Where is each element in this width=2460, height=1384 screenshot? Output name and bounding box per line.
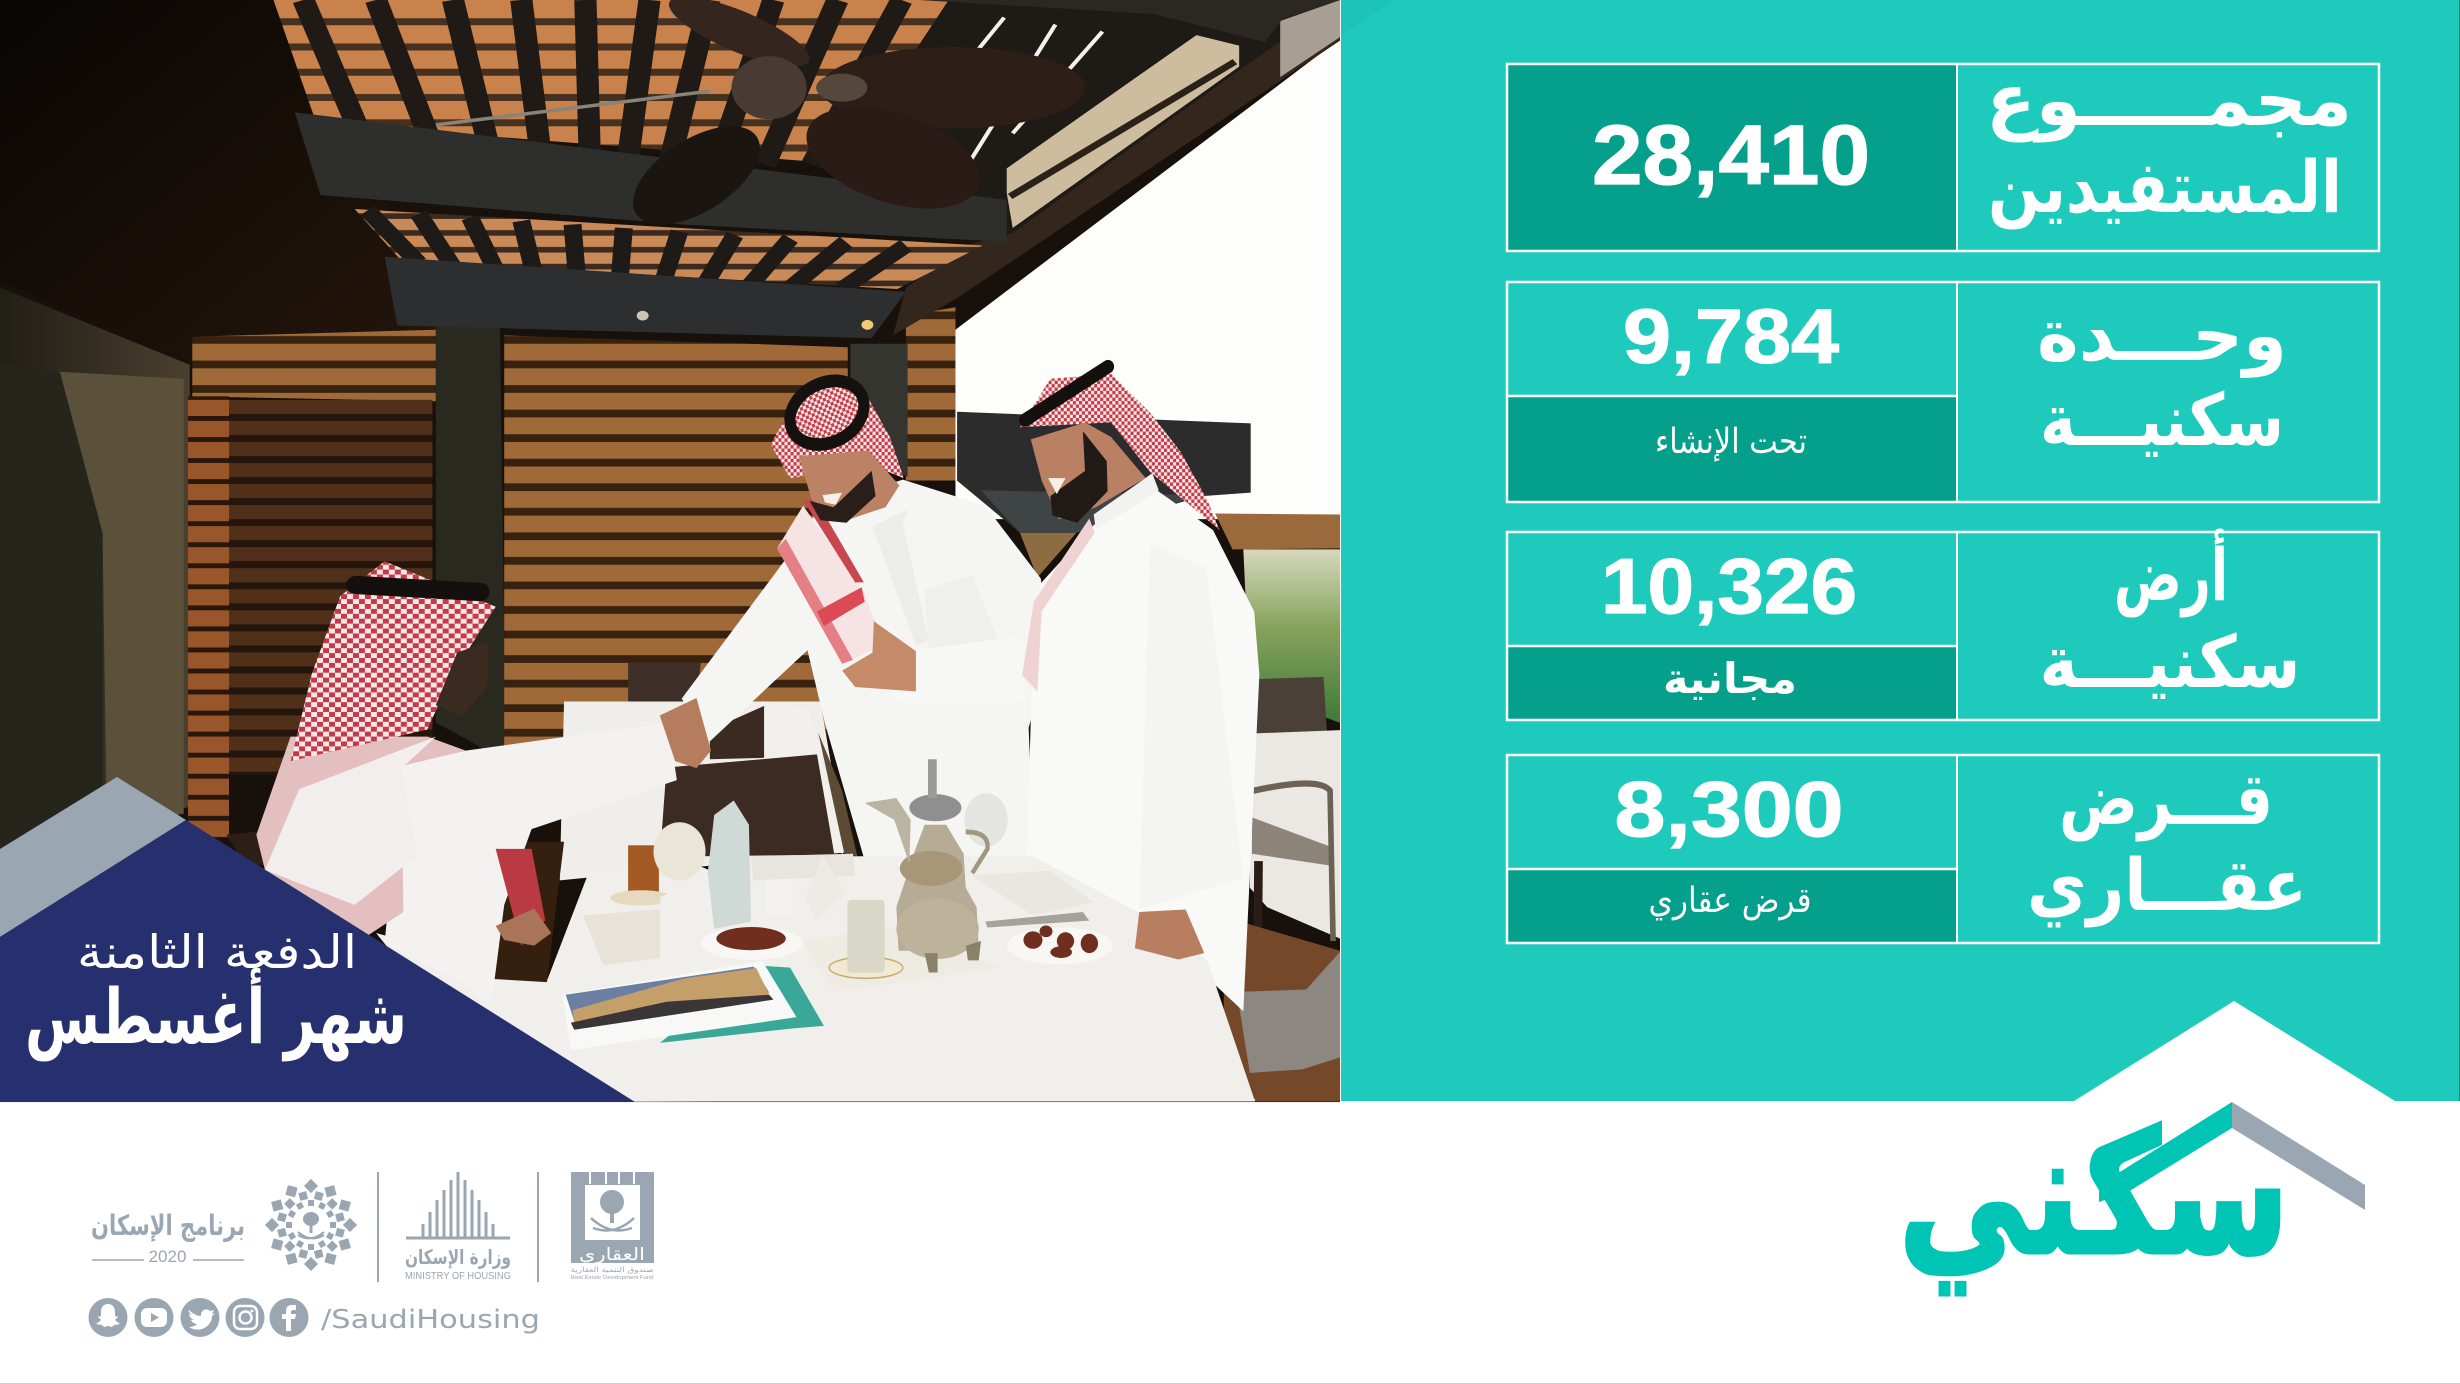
value: 28,410 [1592, 108, 1870, 202]
teal statistics panel [1341, 0, 2460, 1101]
row: real-estate loan [1507, 755, 2379, 943]
sublabel: مجانية [1663, 654, 1797, 703]
Housing Program star emblem [265, 1179, 357, 1271]
value: 9,784 [1623, 294, 1839, 380]
partner logos [91, 1172, 654, 1282]
label line two: سكنيـــة [2040, 620, 2300, 704]
icon: twitter [180, 1298, 220, 1337]
photo background: terrace ceiling and walls [0, 0, 1340, 1102]
label line one: وحـــدة [2037, 293, 2287, 378]
label line two: سكنيـــة [2040, 378, 2284, 462]
seated man reaching for a handshake [226, 561, 711, 1005]
Housing Program year: 2020 [149, 1247, 186, 1266]
fund Arabic name: صندوق التنمية العقارية [570, 1266, 654, 1274]
Ministry of Housing logo [405, 1172, 511, 1282]
icon: youtube [134, 1298, 174, 1337]
value: 8,300 [1614, 765, 1844, 853]
value: 10,326 [1601, 542, 1857, 630]
Housing Program name: برنامج الإسكان [91, 1209, 245, 1242]
label line two: عقـــاري [2027, 843, 2307, 928]
label line two: المستفيدين [1988, 145, 2342, 230]
ministry Arabic name: وزارة الإسكان [405, 1245, 511, 1269]
Sakani logo [1898, 1093, 2365, 1295]
badge line one: الدفعة الثامنة [77, 925, 357, 979]
icon: snapchat [88, 1298, 128, 1337]
ministry English name: MINISTRY OF HOUSING [405, 1271, 511, 1282]
man standing in the middle [682, 370, 1050, 861]
Real Estate Development Fund emblem [570, 1172, 654, 1281]
photo: three men shaking hands at a table on a terrace [0, 0, 1340, 1102]
sublabel: تحت الإنشاء [1655, 422, 1807, 462]
photo background: building, hedge, tables and chairs [660, 412, 1340, 1101]
man standing on the right [842, 367, 1259, 1011]
table with tea set, plates of dates and brochure [376, 759, 1256, 1102]
badge line two: شهر أغسطس [25, 967, 407, 1062]
grey triangle behind the date badge [0, 777, 186, 937]
row: total beneficiaries [1507, 58, 2379, 251]
social media icons and handle [88, 1298, 540, 1337]
label line one: أرض [2114, 528, 2228, 618]
fund English name: Real Estate Development Fund [570, 1275, 654, 1281]
label line one: قـــرض [2059, 757, 2273, 842]
row: residential land [1507, 528, 2379, 720]
navy date badge [0, 820, 635, 1102]
label line one: مجمـــــوع [1986, 58, 2352, 143]
row: housing units [1507, 282, 2379, 502]
icon: facebook [270, 1298, 308, 1337]
logo wordmark: سكني [1898, 1093, 2290, 1295]
social handle: /SaudiHousing [321, 1305, 540, 1335]
fund name in emblem: العقاري [579, 1245, 645, 1265]
icon: instagram [226, 1298, 264, 1337]
sublabel: قرض عقاري [1648, 881, 1812, 921]
